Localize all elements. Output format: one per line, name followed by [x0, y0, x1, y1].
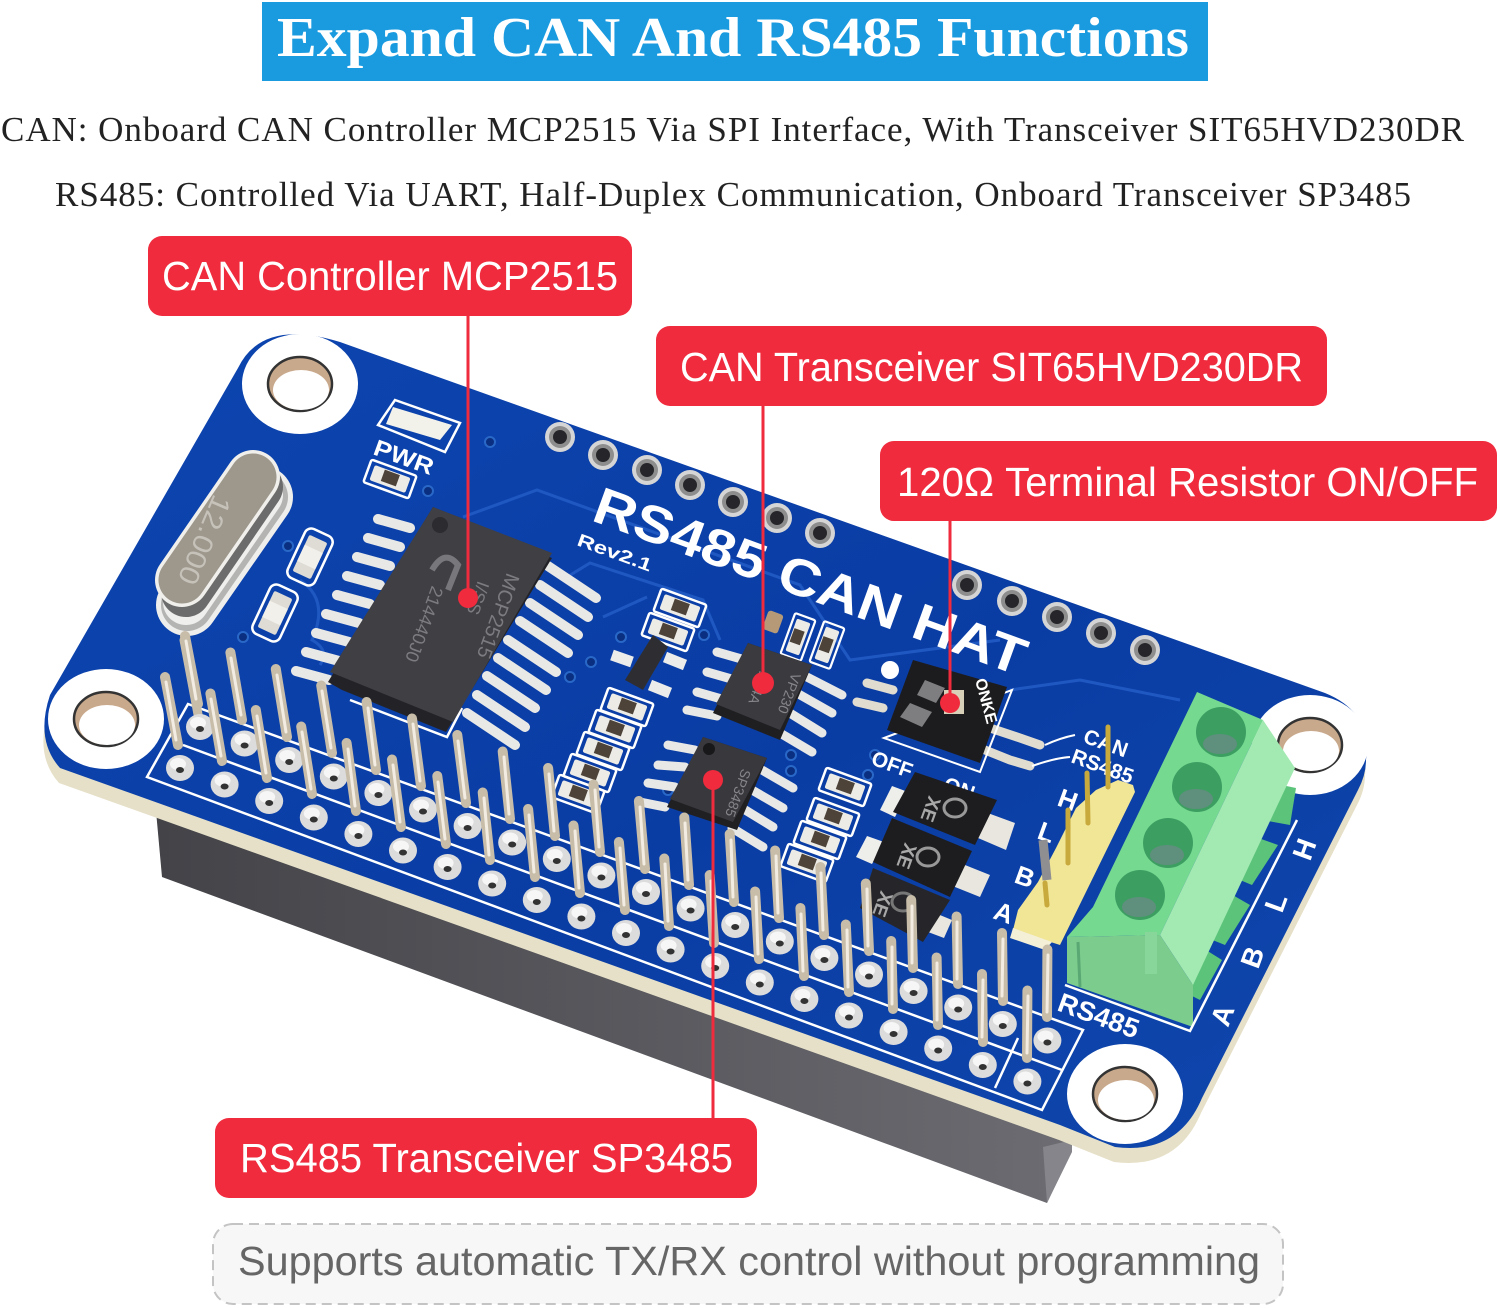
- PWR LED: PWR: [370, 434, 438, 480]
- terminal outline and labels: B: [1235, 942, 1271, 972]
- circuit traces: [300, 490, 1180, 700]
- silkscreen pin labels by yellow header: A: [990, 895, 1018, 930]
- text: RS485 description: RS485: Controlled Via UART, Half-Duplex Communication, Onboard Transceiver SP3485: [55, 175, 1411, 214]
- crystal lead wire: [184, 640, 200, 725]
- silkscreen pin labels by yellow header: H: [1054, 782, 1082, 817]
- terminal outline and labels: H: [1287, 834, 1323, 864]
- DIP switch for terminal resistor: RS485: [1068, 745, 1137, 789]
- chip MCP2515: I/SS: [463, 579, 493, 617]
- top row through holes: [545, 422, 1160, 665]
- callout: CAN Controller MCP2515: CAN Controller MCP2515: [162, 253, 618, 299]
- callout: RS485 Transceiver SP3485: RS485 Transceiver SP3485: [240, 1135, 733, 1181]
- green screw terminal: [1067, 692, 1296, 1027]
- crystal oscillator: 12.000: [172, 491, 237, 589]
- TVS diodes: XE: [868, 888, 896, 919]
- PWR LED: [363, 400, 460, 498]
- pointer: MCP2515: [458, 316, 478, 608]
- callout: CAN Transceiver SIT65HVD230DR: [656, 326, 1327, 406]
- terminal outline and labels: A: [1205, 1000, 1241, 1030]
- title banner: Expand CAN And RS485 Functions: [277, 7, 1189, 69]
- board surface: [44, 334, 1367, 1148]
- chip SIT65HVD230DR: 1E4A: [745, 669, 772, 707]
- chip MCP2515: MCP2515: [472, 570, 523, 661]
- yellow pin header: [1010, 727, 1135, 950]
- silkscreen pin labels by yellow header: L: [1034, 815, 1059, 849]
- chip SP3485: [640, 737, 793, 847]
- pointer: SP3485: [703, 770, 723, 1118]
- callout: CAN Controller MCP2515: [148, 236, 632, 316]
- board illustration: RS485 CAN HAT: [43, 334, 1368, 1203]
- silkscreen pin labels by yellow header: [990, 782, 1082, 930]
- mounting holes: [48, 334, 1368, 1144]
- DIP switch for terminal resistor: [857, 660, 1137, 805]
- note: automatic TX/RX control: Supports automatic TX/RX control without programming: [238, 1238, 1260, 1284]
- board edge: [43, 349, 1366, 1163]
- chip SIT65HVD230DR: [687, 643, 842, 752]
- SMD resistors: [551, 589, 872, 882]
- GPIO pins rear row: [185, 636, 1061, 1054]
- connector block under board: [155, 800, 1072, 1203]
- terminal outline and labels: L: [1259, 889, 1293, 916]
- small capacitors: [250, 526, 335, 644]
- DIP switch for terminal resistor: ONKE: [971, 677, 1000, 726]
- callout: RS485 Transceiver SP3485: [215, 1118, 757, 1198]
- DIP switch for terminal resistor: CAN: [1080, 725, 1131, 762]
- chip MCP2515: [328, 507, 552, 732]
- chip legs MCP2515: [296, 519, 596, 745]
- chip MCP2515: 214440J0: [401, 584, 447, 665]
- chip SIT65HVD230DR: VP230: [775, 671, 804, 716]
- silkscreen header outline: [147, 700, 1083, 1110]
- callout: 120Ω Terminal Resistor ON/OFF: [880, 441, 1497, 521]
- silkscreen pin labels by yellow header: B: [1011, 859, 1039, 894]
- DIP switch for terminal resistor: ON: [940, 773, 978, 805]
- terminal outline and labels: RS485: [1054, 987, 1143, 1044]
- TVS diodes: [856, 772, 1015, 942]
- callout: CAN Transceiver SIT65HVD230DR: CAN Transceiver SIT65HVD230DR: [680, 344, 1303, 390]
- pointer: SIT65HVD230DR: [752, 406, 774, 694]
- transistor: [612, 635, 685, 693]
- text: CAN description: CAN: Onboard CAN Controller MCP2515 Via SPI Interface, With Transceiver SIT65HVD230DR: [1, 110, 1465, 149]
- terminal outline and labels: [1054, 820, 1323, 1044]
- silkscreen: revision: Rev2.1: [575, 530, 655, 575]
- chip SP3485: SP3485: [722, 767, 754, 819]
- pointer: terminal resistor: [940, 521, 960, 713]
- TVS diodes: XE: [916, 793, 944, 824]
- note: automatic TX/RX control: [213, 1224, 1283, 1304]
- TVS diodes: XE: [892, 840, 920, 871]
- callout: 120Ω Terminal Resistor ON/OFF: 120Ω Terminal Resistor ON/OFF: [897, 459, 1478, 505]
- DIP switch for terminal resistor: OFF: [868, 747, 916, 783]
- crystal oscillator: [172, 477, 262, 605]
- silkscreen: board name: RS485 CAN HAT: [586, 477, 1034, 687]
- GPIO pins front row: [165, 677, 1041, 1094]
- vias: [238, 437, 1205, 795]
